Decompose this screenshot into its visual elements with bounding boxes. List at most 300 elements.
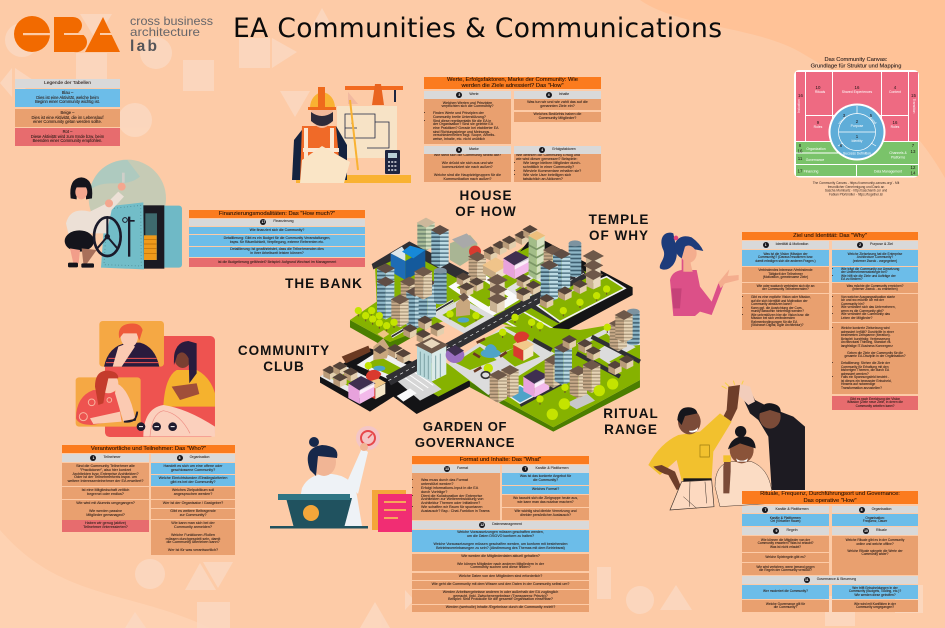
map: fountain square bbox=[432, 298, 495, 334]
cell: concrete goals: bestimmten Zeitspanne (Iteration). bbox=[841, 333, 890, 337]
panel: financing table bbox=[189, 210, 365, 267]
canvas credit: Fabian Pfortmüller - https://together.is/ bbox=[829, 192, 883, 196]
cell: enough participants bbox=[62, 520, 149, 532]
sub-heading: data management bbox=[412, 521, 589, 529]
map: big temple bbox=[415, 337, 448, 382]
cell: success factors: Wie lange bleiben Mitglieder durch- bbox=[523, 161, 581, 165]
cell: target audience: angesprochen werden? bbox=[174, 492, 212, 496]
sub-heading: purpose bbox=[832, 241, 918, 249]
cell: values: weise, Inhalte, etc. nicht unüblich bbox=[433, 137, 485, 141]
cell: brand: kommuniziert sie nach außen? bbox=[442, 165, 493, 169]
cell: format bullets: durch Vorträge? bbox=[421, 490, 447, 494]
sub-heading: identity: Identität & Motivation bbox=[776, 242, 808, 246]
cell: decisions: Wer trifft Entscheidungen in der bbox=[852, 586, 898, 590]
sub-heading: Finanzierung: 17 bbox=[261, 220, 265, 224]
legend beige bbox=[15, 109, 120, 127]
cell: format bullets: unterstützt werden? bbox=[421, 482, 453, 486]
cell: brand: Kommunikation nach außen? bbox=[444, 177, 491, 181]
map label: temple of why: OF WHY bbox=[589, 228, 649, 243]
background wave bottom left bbox=[0, 530, 210, 628]
cell: work time detail: Detaillierung: Ist gewährleistet, dass die Teilnehmenden dies bbox=[230, 247, 324, 251]
cell: data privacy: Betriebsvereinbarungen zu sein? (Abstimmung des Themas mit dem Betriebsrat) bbox=[436, 546, 565, 550]
legend blue: Blau – bbox=[62, 90, 73, 95]
heading bbox=[424, 77, 601, 89]
cell: brand: Welche sind die Hauptzielgruppen für die bbox=[434, 173, 501, 177]
canvas numbers: 16 bbox=[855, 85, 860, 90]
panel: legend bbox=[15, 79, 120, 146]
canvas labels: Financing bbox=[804, 170, 818, 174]
canvas labels: Induction bbox=[797, 99, 801, 113]
canvas numbers: 1 bbox=[856, 134, 859, 139]
cell: required data bbox=[412, 573, 589, 580]
map: left island bbox=[350, 240, 632, 350]
canvas numbers: 9 bbox=[817, 120, 820, 125]
panel: values and success factors table bbox=[424, 77, 601, 182]
cell: registration and roles: Community anmelden? bbox=[174, 525, 212, 529]
cell: vision bullets bbox=[742, 294, 829, 330]
sub-heading: Marke: 5 bbox=[458, 148, 460, 152]
canvas green blocks bbox=[796, 142, 918, 176]
cell: conflicts bbox=[832, 600, 918, 612]
heading bbox=[189, 210, 365, 218]
sub-heading: rituals: 10 bbox=[864, 529, 868, 533]
cell: format bullets bbox=[412, 473, 500, 520]
canvas title bbox=[811, 57, 901, 70]
cell: open or closed: Handelt es sich um eine offene oder bbox=[164, 464, 222, 468]
cell: objective: Welche Zielsetzung hat die Enterprise bbox=[848, 252, 902, 256]
map: right lower plate bbox=[448, 315, 640, 432]
cell: enough participants: Haben wir genug (aktive) bbox=[85, 521, 126, 525]
sub-heading: Finanzierung: Finanzierung bbox=[273, 219, 294, 223]
sub-heading: rituals bbox=[832, 527, 918, 534]
map label: ritual range: RITUAL bbox=[603, 406, 659, 421]
cell: transparency: Beispiel: Sind Protokolle für die gesamte Organisation einsehbar? bbox=[448, 597, 553, 601]
canvas numbers bbox=[798, 85, 916, 176]
illustration: presenter at lectern bbox=[270, 426, 412, 532]
cell: situation bullets: Community hin? bbox=[841, 302, 864, 306]
sub-heading: rules: 9 bbox=[776, 529, 777, 533]
cell: entry criteria: Welche Einrichtstunden /Einstiegskriterien bbox=[159, 476, 227, 480]
cell: shared interest bbox=[742, 267, 829, 282]
cell: audience: wie kann man das nutzbar machen? bbox=[517, 500, 574, 504]
cell: required data: Welche Daten von den Mitgliedern sind erforderlich? bbox=[459, 574, 542, 578]
cell: aim bbox=[832, 283, 918, 293]
map: right lawn bbox=[537, 277, 625, 322]
canvas labels: Identity bbox=[852, 139, 863, 143]
cell: strategy bullets: Wie hilft sie die Ziele und Aufträge der bbox=[841, 274, 896, 278]
canvas labels: Brand bbox=[868, 116, 877, 125]
heading: Format und Inhalte: Das "What" bbox=[460, 457, 541, 463]
cell: concrete goals: ist dieses ein bewusster Entscheid, bbox=[841, 378, 892, 382]
legend beige: Beige – bbox=[61, 110, 74, 115]
cell: organiser: Wer ist der Organisator / Gastgeber? bbox=[163, 501, 223, 505]
cell: budget risk bbox=[189, 258, 365, 267]
cell: offer: die Community? bbox=[533, 478, 558, 482]
cell: situation bullets: Von welcher Ausgangssituation starte bbox=[841, 295, 895, 299]
cell: violations: Wie wird verfahren, wenn jemand gegen bbox=[756, 564, 815, 568]
cell: contributors bbox=[151, 509, 235, 519]
cell: data privacy: Welche Voraussetzungen müssen geschaffen werden, bbox=[457, 530, 544, 534]
cell: success factors: schnittlich in einer Community? bbox=[523, 165, 574, 169]
cell: values: eine Praktiken? Gerade bei etablierter EA bbox=[433, 126, 498, 130]
illustration: thinking woman with ponytail bbox=[660, 233, 739, 316]
cell: values: Welchen Werten und Prinzipien bbox=[443, 101, 492, 105]
sub-heading: Finanzierung bbox=[189, 218, 365, 226]
map label: ritual range bbox=[603, 406, 659, 437]
cell: values: verpflichten sich die Community? bbox=[441, 104, 494, 108]
sub-heading: organisation: Organisation bbox=[190, 455, 209, 459]
sub-heading: purpose: 2 bbox=[859, 243, 861, 247]
map: left towers bbox=[355, 263, 447, 331]
map label: house of how: HOUSE bbox=[459, 188, 513, 203]
sub-heading: format bbox=[412, 465, 500, 473]
cell: transparency bbox=[412, 590, 589, 604]
sub-heading: organisation: 8 bbox=[861, 508, 862, 512]
canvas numbers: 16 bbox=[893, 120, 898, 125]
cell: governance bbox=[742, 600, 829, 612]
cell: member data bbox=[412, 554, 589, 571]
canvas numbers: 15 bbox=[911, 93, 916, 98]
cell: situation bullets: Wie verändert sich das Unternehmen, bbox=[841, 305, 896, 309]
cell: concrete goals: adressiert werden? bbox=[841, 372, 869, 376]
cell: strategy bullets: der Unternehmensstrategie bei? bbox=[841, 270, 887, 274]
cell: strategy bullets bbox=[832, 267, 918, 282]
cell: vision bullets: Kann ggf. die Ausrichtung der Com- bbox=[751, 306, 802, 310]
map: upper buildings bbox=[391, 218, 604, 313]
cell: vision bullets: Community abstützen kann? bbox=[751, 302, 792, 306]
cell: conflicts: Community umgegangen? bbox=[856, 605, 894, 609]
cell: governance: Welche Governance gilt für bbox=[766, 602, 805, 606]
sub-heading: organisation bbox=[832, 506, 918, 513]
legend red: Diese Aktivität wird zum Ende bzw. beim bbox=[31, 134, 104, 139]
cell: concrete goals: Hinweis auf notwendige bbox=[841, 382, 875, 386]
cell: alumni: Wie werden passive bbox=[89, 509, 122, 513]
map label: house of how bbox=[455, 188, 517, 219]
cell: values: Finden Werte und Prinzipien der bbox=[433, 111, 484, 115]
map: lower left block bbox=[320, 348, 470, 414]
cell: connection: der Community Teilnehmenden? bbox=[762, 287, 809, 291]
cell: format bullets: Wie schaffen wir Raum für spontanen bbox=[421, 505, 482, 509]
cell: shared interest: Tätigkeit der Teilnehmer bbox=[768, 272, 803, 276]
cell: organisation bbox=[832, 514, 918, 526]
canvas numbers: 8 bbox=[799, 143, 802, 148]
cell: objective bbox=[832, 250, 918, 266]
sub-heading: identity bbox=[742, 241, 829, 249]
sub-heading: governance: 11 bbox=[805, 578, 809, 582]
canvas numbers: 11 bbox=[798, 156, 803, 161]
heading: Werte, Erfolgsfaktoren, Marke der Community: Wie bbox=[447, 77, 578, 83]
sub-heading: channels: 7 bbox=[764, 508, 766, 512]
canvas numbers: 4 bbox=[894, 85, 897, 90]
sub-heading: Werte bbox=[424, 91, 511, 98]
map label: community club bbox=[238, 343, 330, 374]
cell: violations: die Regeln der Community verstößt? bbox=[759, 568, 812, 572]
legend blue bbox=[15, 89, 120, 107]
map: white paved block bbox=[448, 269, 552, 317]
cell: member data: Wie können Mitglieder nach anderen Mitgliedern in der bbox=[457, 562, 544, 566]
canvas credit: Sascha Mombartz - http://saschamb.co/ und bbox=[825, 189, 887, 193]
illustration: community video call people bbox=[76, 321, 215, 437]
canvas numbers: 12 bbox=[911, 165, 916, 170]
cell: vision bullets: munity daraufhin hinterfragt werden? bbox=[751, 309, 804, 313]
cell: alumni bbox=[62, 500, 149, 520]
cell: networking: direkter persönlicher Austausch? bbox=[520, 513, 571, 517]
cell: contents 1: Was tun wir und wie zahlt das auf die bbox=[527, 100, 588, 104]
cell: contents 1: genannten Ziele ein? bbox=[540, 104, 575, 108]
cell: transparency: Werden Arbeitsergebnisse anderen in oder außerhalb der EA zugänglich bbox=[443, 590, 558, 594]
map: pool bbox=[505, 385, 536, 403]
sub-heading: Werte: Werte bbox=[469, 92, 479, 96]
cell: vision: damit erledigen sich die anderen Fragen.) bbox=[755, 259, 816, 263]
canvas title: Das Community Canvas: bbox=[825, 57, 888, 63]
cell: data privacy: Welche Voraussetzungen müssen geschaffen werden, um konform mit bestehenden bbox=[433, 542, 568, 546]
cell: values: verschiedenheiten bzgl. Scope, Arbeits- bbox=[433, 133, 495, 137]
sub-heading: Inhalte bbox=[514, 91, 601, 98]
cell: connection: Wie oder wodurch verbinden sich die an bbox=[757, 284, 814, 288]
cell: practitioners bbox=[62, 463, 149, 486]
canvas labels: Roles bbox=[891, 125, 900, 129]
cell: concrete goals: Transformation anzustellen? bbox=[841, 386, 882, 390]
sub-heading: purpose: Purpose & Ziel bbox=[870, 242, 893, 246]
cell: concrete goals: Geben die Ziele der Community für die bbox=[847, 350, 903, 354]
sub-heading: organisation: Organisation bbox=[872, 507, 891, 511]
sub-heading: identity: 1 bbox=[765, 243, 767, 247]
sub-heading: Erfolgsfaktoren: 4 bbox=[541, 148, 543, 152]
map: club buildings bbox=[322, 330, 464, 404]
canvas credit: The Community Canvas - https://community-canvas.org/ - Mit bbox=[813, 181, 899, 185]
panel: goals and identity table bbox=[742, 232, 918, 410]
cell: aim: (interner Zweck - zu erarbeiten) bbox=[852, 287, 898, 291]
cell: practitioners: Oder ist der Teilnehmerkreis bspw. um bbox=[74, 475, 137, 479]
canvas numbers: 5 bbox=[870, 113, 873, 118]
cell: vision bullets: Mission bei sich verändernden bbox=[751, 316, 795, 320]
cell: budget risk: Ist die Budgetierung gefährdet? Beispiel: Aufgrund Wechsel im Management bbox=[218, 260, 336, 264]
cell: format bullets: Austausch? Bsp.: Chat-Funktion in Teams bbox=[421, 509, 490, 513]
cell: registration and roles: Wie kann man sich bei der bbox=[171, 521, 215, 525]
canvas labels: Channels & bbox=[889, 151, 908, 155]
sub-heading: Marke: Marke bbox=[469, 147, 479, 151]
cell: entry criteria bbox=[151, 475, 235, 486]
cell: registration and roles: die Community überleben kann? bbox=[166, 540, 220, 544]
cell: values: der Organisation? Sind sie gelebte EA bbox=[433, 122, 493, 126]
canvas numbers: 16 bbox=[798, 93, 803, 98]
legend beige: Dies ist eine Aktivität, die im Lebenslauf bbox=[32, 115, 103, 120]
cell: success factors: Wieviele Kommentare erhalten sie? bbox=[523, 169, 581, 173]
cell: objective: (externer Zweck - vorgegeben) bbox=[853, 259, 897, 263]
cell: offer bbox=[502, 473, 589, 485]
cell: channels bbox=[742, 514, 829, 526]
cell: open or closed: geschlossene Community? bbox=[171, 468, 215, 472]
cell: format bullets: Was muss durch das Format bbox=[421, 478, 468, 482]
cell: practitioners: Sind die Community Teilnehmer alle bbox=[76, 464, 135, 468]
map: right side towers and houses bbox=[536, 309, 640, 420]
cell: channels: Kanäle & Plattformen: bbox=[770, 516, 801, 520]
canvas labels: Platforms bbox=[891, 156, 905, 160]
sub-heading: governance: Governance & Steuerung bbox=[817, 577, 856, 581]
heading bbox=[742, 232, 918, 240]
map label: temple of why bbox=[589, 212, 649, 243]
cell: after vision bbox=[832, 396, 918, 410]
legend heading: Legende der Tabellen bbox=[44, 81, 91, 86]
illustration: construction worker with plans bbox=[292, 84, 411, 183]
cell: rituals: online und welche offline? bbox=[856, 542, 894, 546]
cell: budget detail: bspw. für Räumlichkeit, Verpflegung, externe Referenten etc. bbox=[230, 240, 324, 244]
cell: format bullets: Erfolgt Informations-Input in die EA bbox=[421, 486, 478, 490]
cell: membership: Ist eine Mitgliedschaft zeitlich bbox=[82, 488, 129, 492]
cell: audience bbox=[502, 495, 589, 507]
map label: the bank: THE BANK bbox=[285, 276, 363, 291]
heading: Ziel und Identität: Das "Why" bbox=[793, 233, 867, 239]
canvas credit bbox=[813, 181, 899, 196]
cell: work time detail bbox=[189, 247, 365, 257]
sub-heading: participants: Teilnehmer bbox=[103, 455, 121, 459]
cell: situation bullets: ich und wo möchte ich mit der bbox=[841, 298, 884, 302]
cell: contents 2 bbox=[514, 112, 601, 122]
sub-heading: Erfolgsfaktoren bbox=[514, 146, 601, 154]
cell: alumni: Mitglieder gemanaged? bbox=[86, 513, 125, 517]
cell: enough participants: Teilnehmer /Interessierten? bbox=[83, 525, 128, 529]
cell: vision: Was ist die Vision (Mission der bbox=[763, 252, 808, 256]
cell: membership: begrenzt oder endlos? bbox=[87, 492, 124, 496]
map: plaza with fountain and shops bbox=[473, 332, 551, 403]
cell: which format: Welches Format? bbox=[532, 487, 559, 491]
sub-heading: Inhalte: 4 bbox=[548, 93, 550, 97]
cell: rules of play: Welche Spielregeln gibt es? bbox=[765, 555, 806, 559]
cell: governance: die Community? bbox=[774, 605, 797, 609]
cell: shared interest: (Motivation, gemeinsame Ziele) bbox=[763, 275, 808, 279]
cell: allowed bbox=[742, 536, 829, 552]
cell: violations bbox=[742, 563, 829, 575]
sub-heading: rituals: Rituale bbox=[876, 528, 887, 532]
legend beige: einer Community getan werden sollte. bbox=[33, 119, 102, 124]
canvas labels: Governance bbox=[806, 158, 824, 162]
cell: shared interest: Verbindendes Interesse /Verbindende bbox=[758, 268, 813, 272]
map: small lawn bbox=[506, 312, 552, 337]
canvas numbers: 13 bbox=[911, 149, 916, 154]
canvas credit: freundlicher Genehmigung und Dank an bbox=[828, 185, 884, 189]
cell: values: Community breite Unterstützung? bbox=[433, 115, 486, 119]
map: statue fountain bbox=[446, 293, 480, 323]
cell: success factors: tatsächlich an Aktionen? bbox=[523, 177, 563, 181]
canvas frame bbox=[794, 70, 919, 178]
canvas labels: Purpose bbox=[851, 124, 863, 128]
cell: data privacy: um die Daten DSGVO konform zu halten? bbox=[467, 534, 534, 538]
canvas numbers: 14 bbox=[911, 170, 916, 176]
cell: concrete goals: Welche konkrete Zielsetzung wird bbox=[841, 326, 890, 330]
cell: results bbox=[412, 604, 589, 612]
legend red bbox=[15, 128, 120, 146]
panel: community canvas bbox=[794, 57, 919, 196]
map: centre low houses bbox=[402, 316, 445, 344]
map label: garden of governance: GOVERNANCE bbox=[415, 435, 515, 450]
logo: CBA bbox=[14, 14, 213, 55]
canvas blue circle bbox=[828, 104, 886, 160]
canvas labels: Content bbox=[889, 90, 901, 94]
cell: organisation: Frequenz, Dauer bbox=[863, 519, 887, 523]
sub-heading: participants bbox=[62, 454, 149, 462]
cell: member data: Community suchen und diese finden? bbox=[470, 565, 531, 569]
cell: membership bbox=[62, 487, 149, 499]
cell: rituals: Community wider? bbox=[862, 552, 888, 556]
map: upper road frame bbox=[372, 235, 633, 339]
canvas pink blocks bbox=[796, 72, 918, 141]
canvas labels bbox=[797, 90, 916, 174]
map: lower right roads bbox=[520, 337, 640, 405]
cell: knowledge bbox=[412, 581, 589, 588]
canvas labels: Values bbox=[837, 115, 847, 125]
logo wordmark: architecture bbox=[130, 25, 200, 39]
cell: practitioners: weitere Interessenteinehmer der EA erweitert? bbox=[68, 479, 143, 483]
cell: vision bbox=[742, 250, 829, 266]
cell: decisions: Community (Budgets, Tooling, etc.)? bbox=[849, 589, 901, 593]
cell: organiser bbox=[151, 500, 235, 508]
illustration: high-fiving team bbox=[648, 381, 805, 510]
map label: ritual range: RANGE bbox=[604, 422, 658, 437]
cell: open or closed bbox=[151, 463, 235, 474]
heading bbox=[62, 445, 235, 453]
heading: Finanzierungsmodalitäten: Das "How much?" bbox=[219, 211, 335, 217]
cell: rituals: Welche Rituale spiegeln die Werte der bbox=[847, 548, 903, 552]
cell: contributors: zur Community? bbox=[180, 513, 206, 517]
heading bbox=[742, 491, 918, 504]
cell: alumni: Wie wird mit Alumnis umgegangen? bbox=[76, 501, 135, 505]
map label: community club: CLUB bbox=[263, 359, 305, 374]
cell: vision bullets: auf die sich Identität und Motivation der bbox=[751, 299, 808, 303]
cell: allowed: Community erwarten? Was ist erlaubt? bbox=[758, 541, 813, 545]
cell: contributors: Gibt es weitere Beitragende bbox=[170, 509, 216, 513]
cell: which format bbox=[502, 486, 589, 494]
map: main diagonal road bbox=[388, 273, 585, 381]
cell: format bullets: Architekten zur Weiterentwicklung von bbox=[421, 497, 483, 501]
heading: Verantwortliche und Teilnehmer: Das "Who?" bbox=[91, 446, 206, 452]
cell: values: Sind diese repräsentativ für die EA in bbox=[433, 119, 491, 123]
cell: concrete goals: Detaillierung: Stehen die Ziele der bbox=[841, 361, 890, 365]
panel: rituals and governance table bbox=[742, 491, 918, 612]
isometric city map bbox=[320, 218, 640, 432]
sub-heading: Erfolgsfaktoren: Erfolgsfaktoren bbox=[552, 147, 576, 151]
sub-heading: organisation bbox=[151, 454, 235, 462]
canvas numbers: 7 bbox=[912, 143, 915, 148]
canvas numbers: 3 bbox=[843, 113, 846, 118]
sub-heading: channels bbox=[742, 506, 829, 513]
cell: concrete goals bbox=[832, 323, 918, 394]
heading: werden die Ziele adressiert? Das "How" bbox=[461, 83, 564, 89]
cell: vision bullets: (Stichwort Digital, Agile Architektur)? bbox=[751, 323, 803, 327]
cell: audience: Wo tauscht sich die Zielgruppe heute aus, bbox=[513, 496, 578, 500]
cell: work time detail: in ihrer Arbeitszeit leisten können? bbox=[250, 251, 304, 255]
sub-heading: Marke bbox=[424, 146, 511, 154]
cell: strategy bullets: EA zu fördern? bbox=[841, 277, 862, 281]
cell: registration and roles: müssen durchgespielt sein, damit bbox=[166, 536, 220, 540]
sub-heading: channels: 7 bbox=[524, 467, 526, 471]
cell: results: Werden (wertvolle) Inhalte /Ergebnisse durch die Community erzielt? bbox=[446, 605, 555, 609]
legend heading bbox=[15, 79, 120, 88]
map label: garden of governance: GARDEN OF bbox=[423, 419, 507, 434]
cell: vision: Community)? (Daraus resultieren bzw. bbox=[758, 255, 813, 259]
canvas numbers: 16 bbox=[798, 148, 803, 154]
cell: concrete goals: Community für Erhaltung mit den bbox=[841, 364, 889, 368]
logo wordmark: cross business bbox=[130, 14, 213, 28]
heading: Das operative "How" bbox=[803, 498, 857, 504]
cell: situation bullets: Leben der Mitglieder? bbox=[841, 316, 872, 320]
cell: target audience: Welches Zielpublikum soll bbox=[172, 488, 214, 492]
map label: garden of governance bbox=[415, 419, 515, 450]
canvas labels: Transition bbox=[912, 99, 916, 113]
cell: after vision: Community arbeiten kann? bbox=[856, 404, 894, 408]
illustration: woman opening a safe bbox=[65, 160, 182, 269]
cell: registration and roles: Welche Funktionen /Rollen bbox=[171, 533, 215, 537]
background wave top right bbox=[640, 0, 945, 178]
